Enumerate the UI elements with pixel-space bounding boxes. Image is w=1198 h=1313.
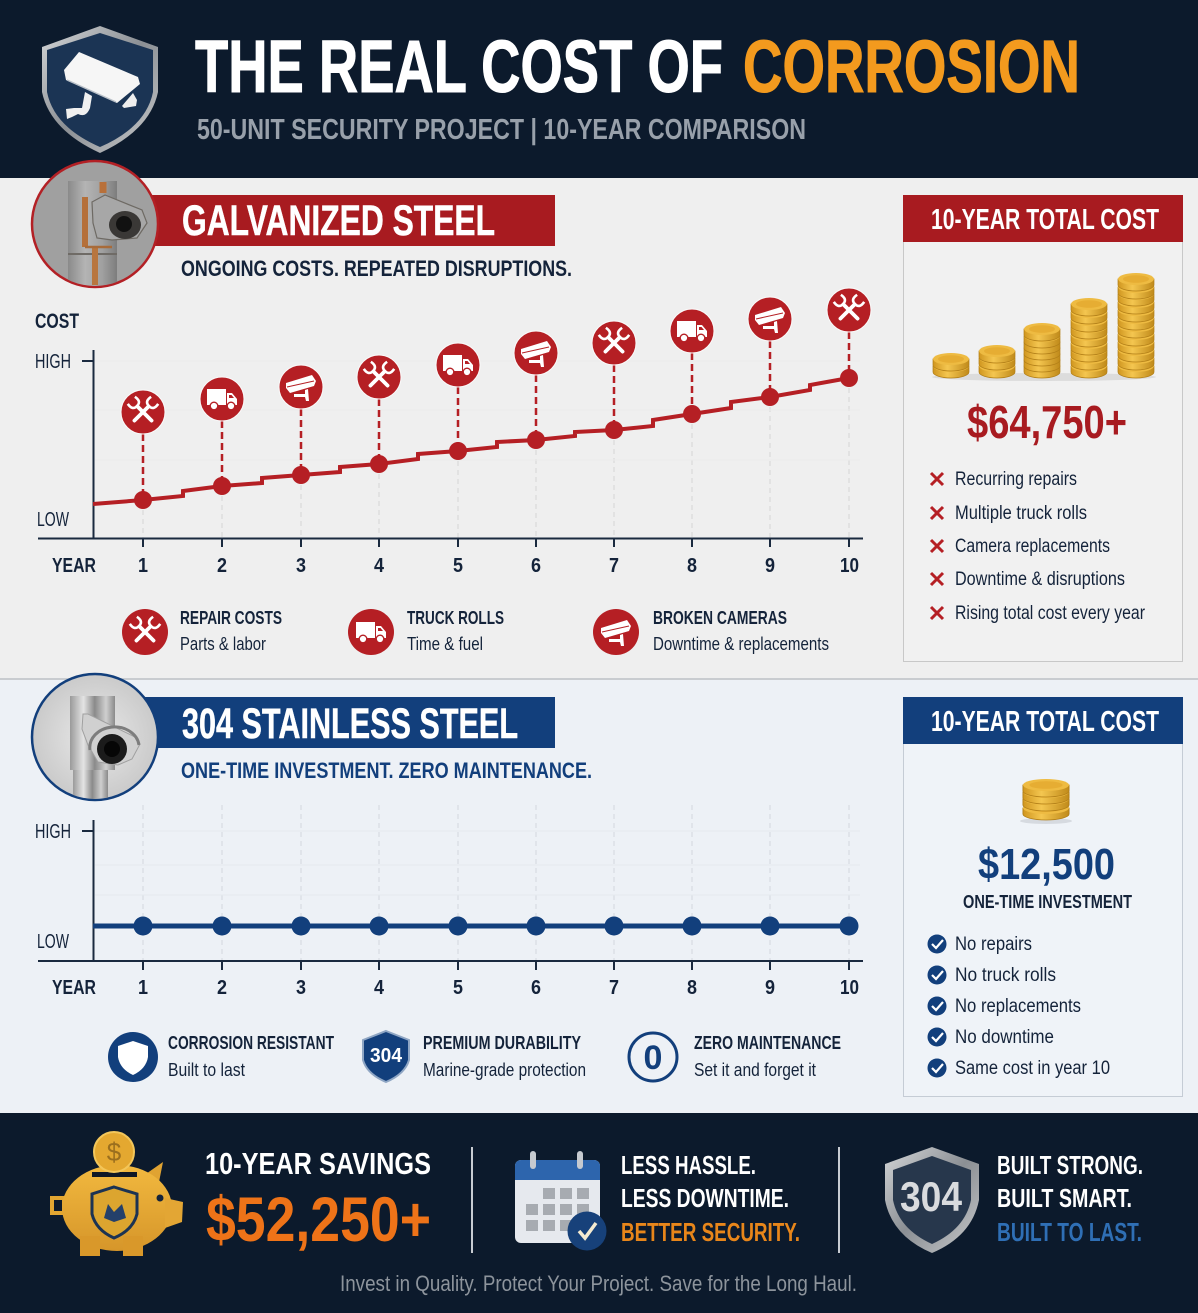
icon: piggy bank (52, 1132, 183, 1256)
event markers (121, 288, 871, 434)
list: recurring problems: Rising total cost every year (955, 603, 1146, 624)
legend: premium durability: Marine-grade protection (423, 1060, 586, 1080)
x axis labels (52, 555, 859, 577)
axis label: cost: COST (35, 310, 79, 333)
legend: broken cameras (593, 608, 829, 655)
legend: zero maintenance: ZERO MAINTENANCE (694, 1033, 841, 1053)
list: benefits: Same cost in year 10 (955, 1058, 1110, 1079)
x axis labels: 2 (217, 977, 227, 999)
legend: truck rolls: Time & fuel (407, 634, 483, 654)
x axis labels: 10 (840, 977, 859, 999)
panel: stainless steel (32, 674, 1183, 1096)
x axis labels: 3 (296, 977, 306, 999)
legend: premium durability: 304 (370, 1045, 403, 1067)
list: recurring problems: Camera replacements (955, 536, 1110, 557)
list: recurring problems: Multiple truck rolls (955, 503, 1087, 524)
connector dashes (143, 332, 849, 492)
legend: repair costs: REPAIR COSTS (180, 608, 282, 628)
legend: repair costs (122, 608, 282, 655)
banner: 304 stainless steel (135, 697, 555, 748)
axes (38, 350, 863, 547)
legend: broken cameras: Downtime & replacements (653, 634, 829, 654)
x axis labels: 6 (531, 977, 541, 999)
chart: stainless flat cost (35, 805, 863, 999)
cost line (93, 924, 849, 928)
x axis labels: 3 (296, 555, 306, 577)
closing tagline: Invest in Quality. Protect Your Project. Save for the Long Haul. (340, 1271, 857, 1296)
x axis labels: 8 (687, 977, 697, 999)
cost line (93, 378, 849, 504)
legend: corrosion resistant (108, 1032, 334, 1082)
icon: rising coin stacks (932, 273, 1156, 381)
list: benefits: No truck rolls (955, 965, 1056, 986)
list: benefits: No downtime (955, 1027, 1054, 1048)
x axis labels: YEAR (52, 977, 96, 999)
x axis labels: YEAR (52, 555, 96, 577)
x axis labels: 7 (609, 977, 619, 999)
message: built strong: BUILT TO LAST. (997, 1217, 1142, 1247)
icon: calendar with check (515, 1151, 606, 1250)
legend: broken cameras: BROKEN CAMERAS (653, 608, 787, 628)
x axis labels (52, 977, 859, 999)
icon: security camera shield (42, 26, 158, 153)
list: recurring problems (931, 469, 1146, 624)
list: recurring problems: Recurring repairs (955, 469, 1077, 490)
x axis labels: 5 (453, 977, 463, 999)
icon: single coin stack (1020, 779, 1072, 824)
axis label: low: LOW (37, 931, 69, 953)
footer (52, 1132, 1143, 1296)
legend: corrosion resistant: CORROSION RESISTANT (168, 1033, 334, 1053)
x axis labels: 4 (374, 555, 385, 577)
message: less hassle: LESS DOWNTIME. (621, 1183, 789, 1213)
icon: 304 shield: 304 (900, 1173, 963, 1220)
photo: corroded camera (32, 161, 158, 292)
x axis labels: 7 (609, 555, 619, 577)
message: built strong: BUILT SMART. (997, 1183, 1132, 1213)
x axis labels: 5 (453, 555, 463, 577)
legend: truck rolls: TRUCK ROLLS (407, 608, 504, 628)
x axis labels: 4 (374, 977, 385, 999)
total: $12,500: $12,500 (978, 840, 1115, 889)
axis label: high: HIGH (35, 821, 71, 843)
legend: premium durability: PREMIUM DURABILITY (423, 1033, 581, 1053)
axis label: low: LOW (37, 509, 69, 531)
legend: premium durability (363, 1031, 586, 1082)
banner: 304 stainless steel: 304 STAINLESS STEEL (182, 700, 518, 748)
message: less hassle: LESS HASSLE. (621, 1150, 756, 1180)
tagline: one-time investment: ONE-TIME INVESTMENT. ZERO MAINTENANCE. (181, 758, 592, 783)
callout: 10-year savings (205, 1146, 431, 1255)
panel header (903, 697, 1183, 744)
photo: stainless camera (32, 674, 158, 810)
callout: 10-year savings: $52,250+ (206, 1185, 431, 1255)
chart: galvanized rising cost (35, 288, 871, 577)
panel: galvanized total cost (903, 195, 1183, 662)
panel: galvanized steel background (0, 178, 1198, 678)
x axis labels: 8 (687, 555, 697, 577)
legend: repair costs: Parts & labor (180, 634, 266, 654)
panel header (903, 195, 1183, 242)
title: THE REAL COST OF (195, 25, 723, 108)
message: built strong: BUILT STRONG. (997, 1150, 1143, 1180)
banner: galvanized steel: GALVANIZED STEEL (182, 197, 495, 245)
caption: one-time investment: ONE-TIME INVESTMENT (963, 892, 1132, 912)
message: less hassle: BETTER SECURITY. (621, 1217, 800, 1247)
legend: zero maintenance: 0 (644, 1039, 662, 1077)
panel: stainless total cost (903, 697, 1183, 1096)
icon: piggy bank: $ (107, 1137, 122, 1167)
total: $64,750+: $64,750+ (967, 396, 1127, 448)
list: benefits: No replacements (955, 996, 1081, 1017)
x axis labels: 9 (765, 555, 775, 577)
message: less hassle (621, 1150, 800, 1247)
data points (134, 916, 858, 936)
legend: truck rolls (348, 608, 504, 655)
x axis labels: 10 (840, 555, 859, 577)
axes (38, 820, 863, 970)
legend: zero maintenance (629, 1033, 841, 1081)
subtitle: 50-UNIT SECURITY PROJECT | 10-YEAR COMPARISON (197, 114, 806, 146)
list: benefits (928, 934, 1110, 1079)
x axis labels: 1 (138, 555, 148, 577)
tagline: ongoing costs: ONGOING COSTS. REPEATED DISRUPTIONS. (181, 256, 572, 281)
callout: 10-year savings: 10-YEAR SAVINGS (205, 1146, 431, 1181)
panel: galvanized steel (32, 161, 1183, 662)
axis label: high: HIGH (35, 351, 71, 373)
data points (134, 369, 858, 509)
x axis labels: 2 (217, 555, 227, 577)
title: CORROSION (743, 25, 1080, 108)
icon: 304 shield (885, 1147, 979, 1253)
list: recurring problems: Downtime & disruptions (955, 569, 1125, 590)
legend: zero maintenance: Set it and forget it (694, 1060, 816, 1080)
x axis labels: 6 (531, 555, 541, 577)
x axis labels: 1 (138, 977, 148, 999)
panel: stainless steel background (0, 680, 1198, 1113)
legend: corrosion resistant: Built to last (168, 1060, 245, 1080)
header (42, 25, 1080, 153)
list: benefits: No repairs (955, 934, 1032, 955)
message: built strong (997, 1150, 1143, 1247)
x axis labels: 9 (765, 977, 775, 999)
